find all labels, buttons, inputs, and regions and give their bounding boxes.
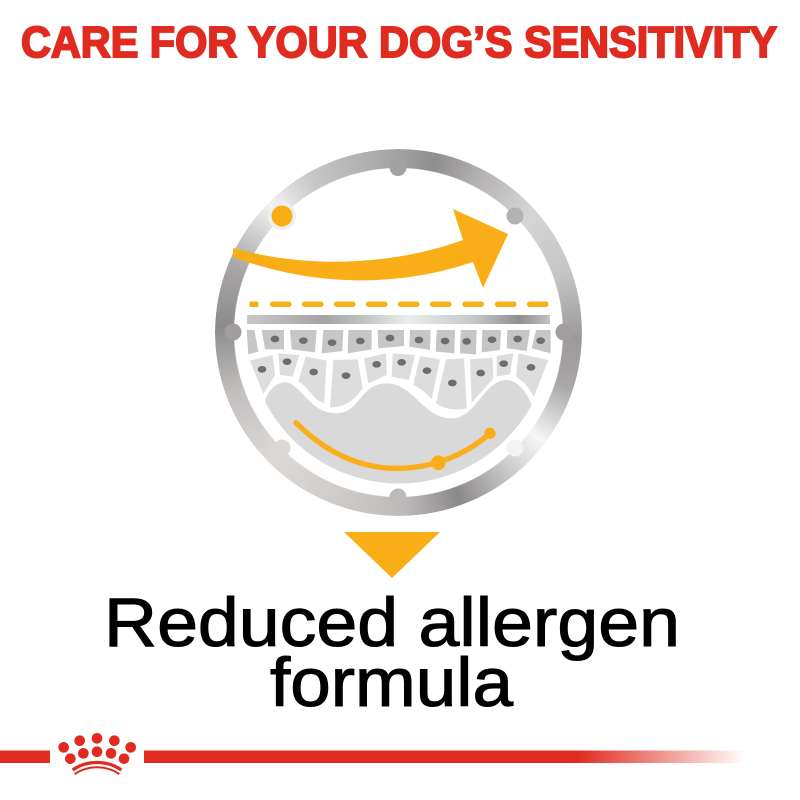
dashed line: [250, 302, 548, 307]
skin diagram: [247, 330, 551, 483]
main text line 2: formula: [270, 644, 514, 721]
top cell layer: [247, 330, 551, 354]
curved arrow: [233, 209, 508, 288]
footer bar right: [144, 750, 746, 763]
metallic skin bar: [247, 315, 550, 324]
footer bar left: [0, 750, 50, 763]
icon: crown logo: [58, 733, 136, 774]
yellow curve with dots: [296, 423, 496, 470]
icon: yellow dot on ring: [268, 202, 296, 230]
ring notches: [224, 159, 572, 506]
cell nuclei: [258, 335, 545, 386]
lower cell layer: [250, 353, 548, 409]
main text line 1: Reduced allergen: [104, 584, 680, 661]
dermis: [265, 380, 532, 483]
down triangle: [344, 532, 440, 578]
metallic ring: [215, 149, 582, 516]
